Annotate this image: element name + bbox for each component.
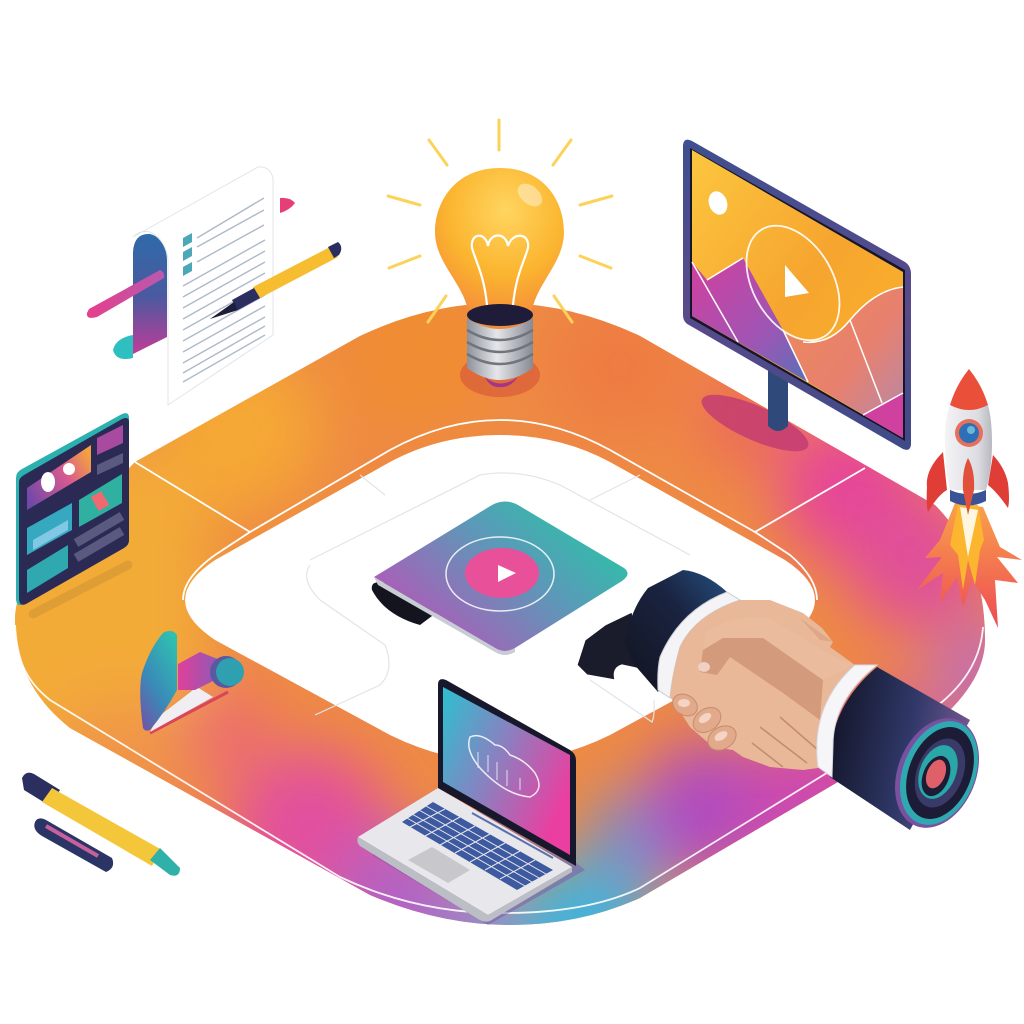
icon: laptop [357,679,585,925]
icon: video monitor [683,140,911,462]
icon: fountain pen [210,242,341,319]
icon: small pencil case [34,818,113,872]
icon: handshake with camera lens [577,570,995,840]
monitor purple hill [692,258,808,382]
right cuff [817,665,877,777]
panel: gradient ring platform [15,304,985,925]
ring outline [15,625,983,913]
panel: dashboard tablet [16,413,129,614]
laptop screen logo [469,736,539,797]
icon: document with pen holder [87,167,341,405]
lens [879,706,995,840]
isometric workflow illustration [15,118,1022,925]
right sleeve [830,667,970,830]
icon: small ribbon shape on ring [140,631,244,733]
clasped hands [670,600,855,770]
monitor lower-right hill [783,287,903,438]
left dark device [577,612,645,680]
panel: centre video tablet [372,502,628,655]
icon: light bulb [388,120,612,397]
bulb rays [388,120,612,322]
icon: rocket [917,369,1022,628]
left sleeve [625,570,727,692]
left cuff [658,592,740,698]
rocket flame [917,503,1022,628]
icon: yellow marker [22,773,180,876]
